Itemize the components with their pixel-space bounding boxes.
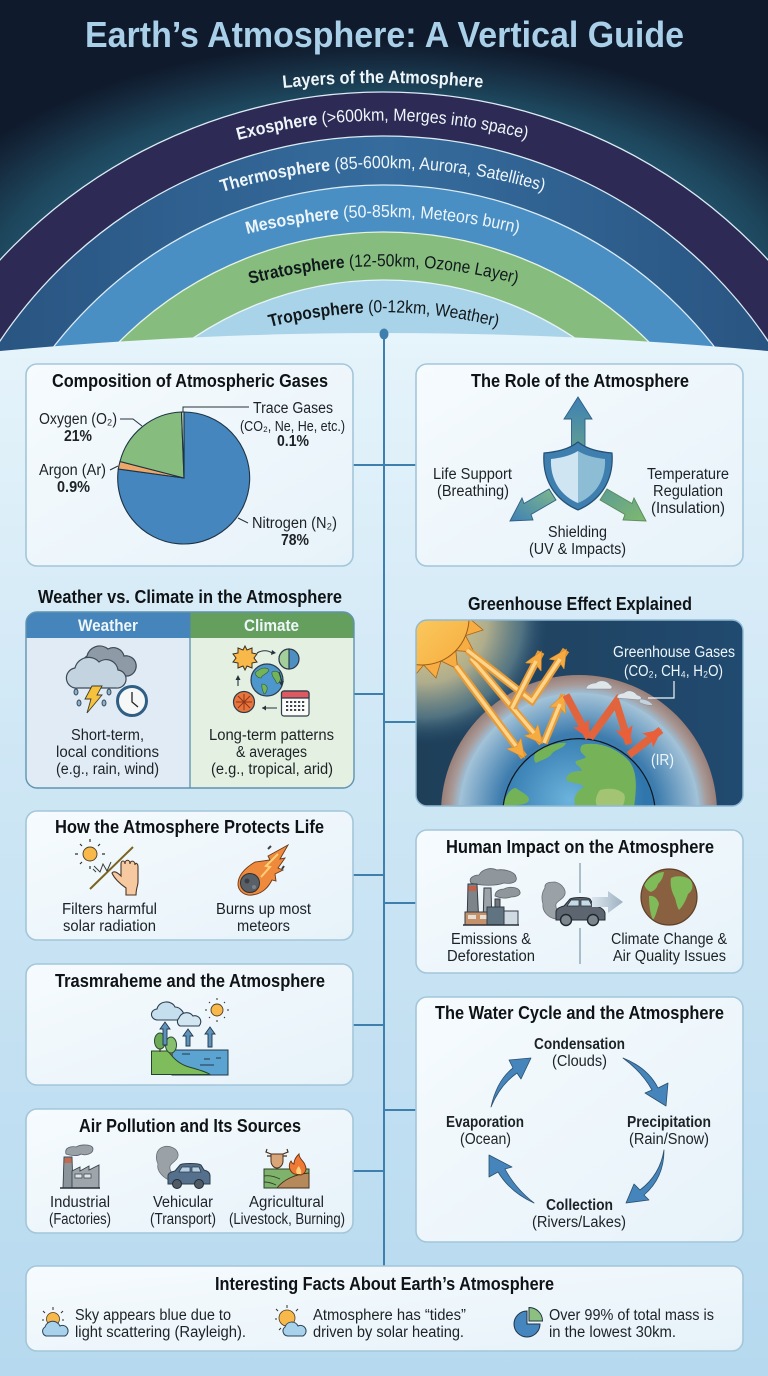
label: trace gases [240,400,345,450]
text: shielding: Shielding [548,524,607,541]
column: weather [26,612,190,788]
text: industrial: (Factories) [49,1211,111,1228]
heading: How the Atmosphere Protects Life [55,816,324,837]
text: emissions: Deforestation [447,948,535,965]
icon: sun and cloud [42,1307,68,1336]
panel: transpiration and the atmosphere [26,964,353,1085]
heading: Human Impact on the Atmosphere [446,836,714,857]
text: fact one [75,1307,246,1341]
panel: how the atmosphere protects life [26,811,353,940]
icon: sun and cloud [275,1305,306,1336]
icon: shield [544,442,612,510]
label: evaporation: (Ocean) [460,1131,511,1148]
label: precipitation: (Rain/Snow) [629,1131,709,1148]
text: climate change [611,931,728,965]
text: temperature regulation [647,466,729,517]
arrows: incoming solar radiation [456,650,566,757]
text: life support: (Breathing) [437,483,509,500]
icon: mini pie chart [514,1308,542,1337]
text: greenhouse gases [613,644,735,680]
heading: Trasmraheme and the Atmosphere [55,970,325,991]
icon: earth [502,738,656,806]
text: filters radiation [62,901,157,935]
panel: weather vs climate table [26,612,354,788]
panel: greenhouse effect illustration [415,619,744,807]
text: fact two: driven by solar heating. [313,1324,464,1341]
text: infrared label: (IR) [651,752,674,769]
text: burns meteors: meteors [237,918,290,935]
label: argon: 0.9% [57,479,90,496]
text: fact two [313,1307,466,1341]
label: nitrogen [252,515,337,549]
text: burns meteors [216,901,312,935]
text: emissions: Emissions & [451,931,532,948]
text: climate change: Climate Change & [611,931,728,948]
text: fact three: in the lowest 30km. [549,1324,676,1341]
arrow: cause to effect [592,891,623,913]
text: fact three [549,1307,714,1341]
label: evaporation [446,1114,524,1148]
text: temperature regulation: Regulation [653,483,723,500]
pie chart [118,412,250,544]
label: trace gases: Trace Gases [253,400,333,417]
layer: troposphere: Troposphere (0-12km, Weather) [267,300,498,330]
column: weather: Weather [78,617,139,635]
heading: layers of the atmosphere: Layers of the Atmosphere [282,70,483,90]
arrow: left [510,489,556,521]
label: collection: Collection [546,1197,613,1214]
panel: the role of the atmosphere [416,364,743,566]
text: vehicular: Vehicular [153,1194,213,1211]
label: condensation: Condensation [534,1036,625,1053]
label: precipitation: Precipitation [627,1114,711,1131]
leader lines [110,407,249,523]
heading: Interesting Facts About Earth’s Atmosphere [215,1273,554,1294]
icon: landscape with rising vapour [151,998,229,1075]
arrow: right [600,489,646,521]
label: collection: (Rivers/Lakes) [532,1214,626,1231]
label: trace gases: (CO₂, Ne, He, etc.) [240,419,345,435]
icon: burning meteor [238,845,288,895]
label: oxygen: 21% [64,428,92,445]
column: climate [190,612,354,788]
icon: car with exhaust [156,1146,210,1188]
leader line [648,681,674,698]
column: climate: Climate [244,617,299,635]
text: fact two: Atmosphere has “tides” [313,1307,466,1324]
label: condensation: (Clouds) [552,1053,607,1070]
layer: thermosphere: Thermosphere (85-600km, Aurora, Satellites) [218,156,544,194]
text: climate description: (e.g., tropical, arid) [211,761,333,778]
atmosphere halo [441,675,717,806]
label: precipitation [627,1114,711,1148]
text: emissions [447,931,535,965]
background: space sky [0,0,768,360]
layer: exosphere: Exosphere (>600km, Merges into space) [236,108,528,142]
label: nitrogen: 78% [281,532,309,549]
text: agricultural [229,1194,345,1228]
label: trace gases: 0.1% [277,433,309,450]
text: filters radiation: Filters harmful [62,901,157,918]
icon: climate cycle [233,646,309,716]
text: fact one: light scattering (Rayleigh). [75,1324,246,1341]
icon: livestock and burning field [264,1149,309,1188]
label: argon [39,462,106,496]
text: greenhouse gases: (CO₂, CH₄, H₂O) [624,663,723,680]
panel: human impact on the atmosphere [416,830,743,973]
text: weather description: (e.g., rain, wind) [56,761,159,778]
text: climate description: & averages [236,744,307,761]
arrows: trapped infrared radiation [566,695,661,755]
text: fact one: Sky appears blue due to [75,1307,231,1324]
label: evaporation: Evaporation [446,1114,524,1131]
text: life support [433,466,513,500]
text: shielding [529,524,626,558]
background: earth surface [0,333,768,1376]
icon: car with exhaust [542,882,605,926]
text: weather description: local conditions [56,744,159,761]
text: vehicular [150,1194,216,1228]
icon: clouds [586,681,653,705]
icon: storm cloud and clock [66,646,146,716]
label: oxygen: Oxygen (O₂) [39,411,117,428]
text: shielding: (UV & Impacts) [529,541,626,558]
text: weather description [56,727,159,778]
icon: factory [60,1145,100,1188]
icon: damaged globe [641,869,697,925]
text: temperature regulation: (Insulation) [651,500,725,517]
panel: air pollution and its sources [26,1109,353,1233]
layer: stratosphere: Stratosphere (12-50km, Ozone Layer) [248,254,518,286]
text: agricultural: Agricultural [249,1194,324,1211]
text: weather description: Short-term, [71,727,144,744]
layer: mesosphere: Mesosphere (50-85km, Meteors burn) [245,204,519,236]
heading: Air Pollution and Its Sources [79,1115,301,1136]
label: argon: Argon (Ar) [39,462,106,479]
text: industrial: Industrial [50,1194,110,1211]
text: fact three: Over 99% of total mass is [549,1307,714,1324]
text: agricultural: (Livestock, Burning) [229,1211,345,1228]
text: industrial [49,1194,111,1228]
title: Earth’s Atmosphere: A Vertical Guide [85,14,684,55]
layer diagram: concentric atmosphere arcs [0,91,768,351]
text: filters radiation: solar radiation [63,918,156,935]
icon: factory [463,869,520,925]
arrow: upward [564,397,592,446]
text: climate description [209,727,334,778]
label: collection [532,1197,626,1231]
heading: greenhouse effect explained: Greenhouse Effect Explained [468,593,692,614]
text: temperature regulation: Temperature [647,466,729,483]
text: greenhouse gases: Greenhouse Gases [613,644,735,661]
label: oxygen [39,411,117,445]
heading: Composition of Atmospheric Gases [52,370,328,391]
panel: the water cycle [416,997,743,1242]
text: vehicular: (Transport) [150,1211,216,1228]
heading: The Role of the Atmosphere [471,370,689,391]
panel: interesting facts [26,1266,743,1351]
text: burns meteors: Burns up most [216,901,312,918]
arrows: water cycle [489,1058,668,1203]
text: life support: Life Support [433,466,513,483]
text: climate description: Long-term patterns [209,727,334,744]
text: climate change: Air Quality Issues [613,948,726,965]
panel: composition of atmospheric gases [26,364,353,566]
central timeline with connectors [353,328,416,1266]
icon: sun filtered by hand [75,839,138,895]
label: nitrogen: Nitrogen (N₂) [252,515,337,532]
label: condensation [534,1036,625,1070]
heading: The Water Cycle and the Atmosphere [435,1002,724,1023]
icon: sun [416,620,484,679]
heading: weather vs climate: Weather vs. Climate in the Atmosphere [38,586,342,607]
divider [579,863,581,964]
